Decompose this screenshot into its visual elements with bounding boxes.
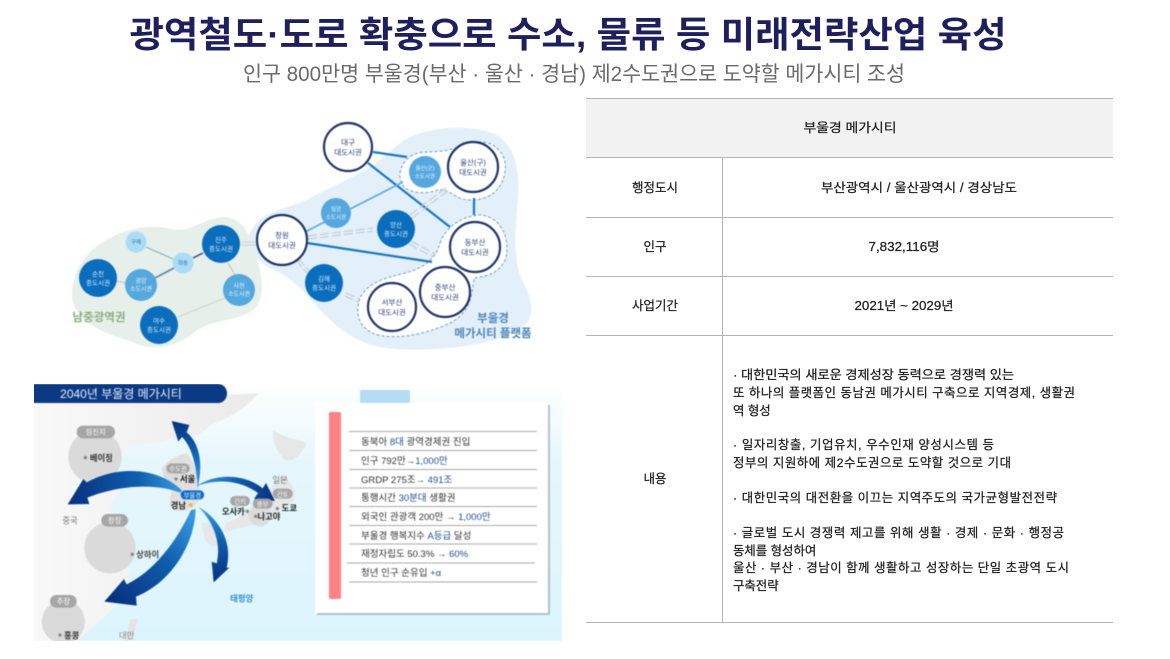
connecting lines: [117, 152, 474, 317]
row: 사업기간: 2021년 ~ 2029년: [854, 299, 954, 313]
card: key targets: 통행시간 30분대 생활권: [361, 492, 456, 504]
panel: 2040 map: [33, 384, 562, 643]
node: 밀양: 소도시권: [326, 213, 346, 221]
node: 밀양: 밀양: [331, 205, 341, 213]
row: 행정도시: [632, 180, 1017, 195]
arrow: north: [172, 421, 200, 488]
node: 순천: 순천: [92, 269, 104, 278]
row: 내용 text: · 대한민국의 새로운 경제성장 동력으로 경쟁력 있는: [733, 368, 1014, 382]
row: 내용 text: · 대한민국의 대전환을 이끄는 지역주도의 국가균형발전전략: [733, 491, 1057, 505]
map labels: 베이징: [90, 453, 113, 463]
map labels: 중부: [257, 500, 269, 508]
arrow: west: [68, 471, 187, 504]
node: 양산: [377, 210, 415, 248]
node: 김해: 김해: [318, 274, 330, 283]
map labels: 도쿄: [282, 503, 297, 513]
land: Japan: [202, 430, 307, 546]
node: 울산(구): [448, 142, 498, 192]
map labels: 태평양: [230, 594, 253, 604]
node: 여수: 중도시권: [147, 326, 171, 334]
map labels: 긴키: [234, 497, 246, 506]
map labels: 서울: [180, 474, 196, 484]
node: 울산(구): 대도시권: [459, 168, 487, 177]
title: 광역철도·도로 확충으로 수소, 물류 등 미래전략산업 육성: [130, 14, 1006, 55]
node: 대구: 대도시권: [334, 148, 362, 157]
region: 부울경 메가시티 플랫폼: [249, 128, 532, 350]
node: 진주: 진주: [215, 235, 227, 244]
row: 행정도시: 행정도시: [632, 180, 678, 195]
row: 내용 text: 동체를 형성하여: [733, 544, 816, 558]
card: key targets: 재정자립도 50.3% → 60%: [361, 548, 469, 560]
map labels: 부울경: [184, 490, 201, 499]
label: 부울경 메가시티 플랫폼: [454, 312, 532, 340]
card: key targets: 동북아 8대 광역경제권 진입: [361, 436, 470, 448]
land: Korea: [162, 453, 200, 512]
accent bar: [329, 412, 341, 599]
arrow: south-west: [104, 509, 196, 606]
label: 남중광역권: 남중광역권: [73, 311, 125, 324]
card: key targets: 청년 인구 순유입 +α: [361, 567, 442, 579]
row: 내용 text: 역 형성: [733, 404, 771, 418]
map labels: 수도권: [169, 465, 187, 473]
node: 광양: 소도시권: [130, 285, 152, 293]
node: 동부산: 대도시권: [461, 248, 489, 257]
node: 사천: 사천: [233, 282, 245, 290]
arrow: east: [196, 477, 275, 501]
node: 서부산: [368, 283, 416, 331]
dashed cluster: 부산: [358, 215, 507, 337]
map artwork: [33, 393, 307, 643]
node: 광양: [125, 269, 157, 301]
node: 여수: [140, 306, 178, 344]
dashed cluster: 울산: [400, 142, 505, 200]
row: 내용 text: · 글로벌 도시 경쟁력 제고를 위해 생활 · 경제 · 문화 · 행정공: [733, 525, 1064, 540]
node: 중부산: [420, 267, 470, 317]
node: 구례: [126, 232, 146, 252]
map labels: 오사카: [222, 506, 245, 516]
row: 인구: 인구: [643, 240, 667, 254]
map labels: 대만: [119, 631, 135, 641]
row: 내용 text: · 일자리창출, 기업유치, 우수인재 양성시스템 등: [733, 438, 994, 452]
table header: [586, 99, 1113, 157]
row: 내용 text: [733, 368, 1075, 593]
map labels: 중국: [62, 516, 78, 526]
node: 울산(군): 소도시권: [415, 172, 435, 180]
card: key targets: GRDP 275조→ 491조: [361, 475, 453, 486]
map header bar: 2040년 부울경 메가시티: [60, 387, 182, 401]
subtitle: 인구 800만명 부울경(부산 · 울산 · 경남) 제2수도권으로 도약할 메가시티 조성: [243, 63, 905, 86]
row: 내용 text: 정부의 지원하에 제2수도권으로 도약할 것으로 기대: [733, 455, 1011, 470]
node: 하동: [172, 252, 194, 274]
node: 김해: 중도시권: [312, 284, 336, 292]
node: 하동: 하동: [178, 259, 188, 267]
node: 동부산: [450, 222, 500, 272]
node: 진주: 중도시권: [209, 245, 233, 253]
zone circles: [42, 430, 271, 643]
node: 서부산: 서부산: [382, 297, 402, 307]
row: 내용 text: 또 하나의 플랫폼인 동남권 메가시티 구축으로 지역경제, 생활권: [733, 386, 1075, 400]
node: 중부산: 대도시권: [431, 293, 459, 302]
panel: network diagram: [72, 123, 532, 350]
row: 사업기간: 사업기간: [632, 299, 678, 313]
tab behind card: [360, 390, 410, 403]
card: key targets: 인구 792만→1,000만: [361, 456, 448, 467]
map labels: 나고야: [257, 511, 281, 521]
node: 울산(군): 울산(군): [416, 164, 435, 172]
node: 울산(구): 울산(구): [460, 157, 486, 167]
map labels: 간토: [277, 489, 289, 498]
node: 대구: 대구: [341, 138, 355, 147]
node: 창원: [257, 215, 307, 265]
label: 부울경 메가시티 플랫폼: 메가시티 플랫폼: [454, 326, 532, 340]
land: China: [33, 393, 258, 642]
row: 인구: [643, 240, 940, 254]
node: 순천: 중도시권: [86, 279, 110, 287]
map labels: 홍콩: [64, 631, 80, 641]
node: 양산: 양산: [390, 220, 402, 229]
row: 사업기간: [632, 299, 954, 313]
node: 여수: 여수: [153, 316, 165, 325]
node: 서부산: 대도시권: [378, 308, 406, 317]
node: 대구: [324, 123, 372, 171]
node: 중부산: 중부산: [435, 282, 455, 292]
map labels: 주장: [57, 597, 70, 606]
map header bar: [33, 384, 227, 403]
table header: 부울경 메가시티: [804, 121, 896, 135]
node: 사천: [223, 274, 255, 306]
node: 진주: [202, 225, 240, 263]
row: 행정도시: 부산광역시 / 울산광역시 / 경상남도: [821, 181, 1017, 195]
map labels: 창장: [108, 516, 122, 525]
map labels: [50, 426, 297, 641]
node: 광양: 광양: [135, 277, 147, 285]
row: 내용 text: 울산 · 부산 · 경남이 함께 생활하고 성장하는 단일 초광역 도시: [733, 561, 1069, 575]
table: 부울경 메가시티: [586, 98, 1113, 622]
node: 울산(군): [409, 156, 441, 188]
row: 내용 label: 내용: [643, 472, 667, 486]
node: 창원: 창원: [275, 231, 289, 240]
row: 내용 text: 구축전략: [733, 579, 779, 593]
map labels: 경남: [171, 501, 186, 511]
node: 구례: 구례: [131, 238, 141, 246]
card: key targets: 부울경 행복지수 A등급 달성: [361, 530, 471, 542]
land: Taiwan: [125, 618, 137, 642]
node: 동부산: 동부산: [465, 237, 485, 247]
node: 양산: 중도시권: [384, 230, 408, 238]
region: 남중광역권: [72, 217, 262, 347]
node: 밀양: [321, 198, 351, 228]
arrow: south-east: [198, 507, 229, 582]
map labels: 상하이: [136, 549, 159, 559]
map labels: 징진지: [86, 428, 106, 437]
map labels: 일본: [272, 475, 288, 485]
label: 부울경 메가시티 플랫폼: 부울경: [477, 312, 509, 325]
node: 사천: 소도시권: [228, 290, 250, 298]
node: 창원: 대도시권: [268, 241, 296, 250]
card: key targets: [315, 403, 550, 615]
node: 김해: [305, 264, 343, 302]
card: key targets: 외국인 관광객 200만 → 1,000만: [361, 511, 491, 523]
row: 인구: 7,832,116명: [868, 240, 940, 254]
node: 순천: [79, 259, 117, 297]
